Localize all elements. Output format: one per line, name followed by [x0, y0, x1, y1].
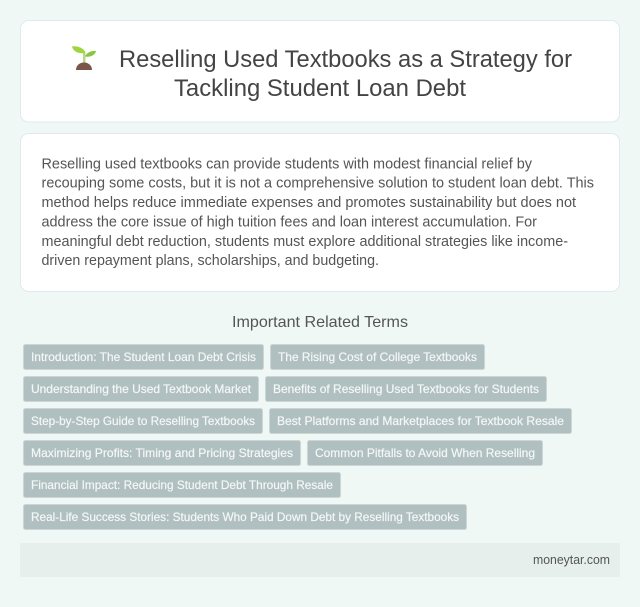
tag: Financial Impact: Reducing Student Debt Through Resale — [31, 478, 333, 492]
tag — [24, 440, 300, 466]
panel: title card — [20, 20, 620, 122]
tag: Real-Life Success Stories: Students Who Paid Down Debt by Reselling Textbooks — [31, 510, 459, 524]
tags: related terms — [24, 344, 572, 530]
tag — [308, 440, 542, 466]
tag: Introduction: The Student Loan Debt Crisis — [31, 350, 256, 364]
tag — [266, 376, 546, 402]
tag — [24, 408, 262, 434]
heading: related terms: Important Related Terms — [232, 314, 408, 331]
tag: Step-by-Step Guide to Reselling Textbooks — [31, 414, 255, 428]
summary text: address the core issue of high tuition fees and loan interest accumulation. For — [42, 214, 537, 230]
tag: The Rising Cost of College Textbooks — [278, 350, 477, 364]
title: Reselling Used Textbooks as a Strategy for — [119, 46, 572, 73]
panel: summary — [20, 134, 620, 292]
title — [119, 46, 572, 102]
tag: Benefits of Reselling Used Textbooks for Students — [273, 382, 539, 396]
summary text: meaningful debt reduction, students must explore additional strategies like income- — [42, 234, 568, 250]
tag — [24, 376, 258, 402]
tag — [270, 344, 484, 370]
summary text — [42, 156, 594, 269]
tag: Understanding the Used Textbook Market — [31, 382, 252, 396]
summary text: driven repayment plans, scholarships, and budgeting. — [42, 253, 379, 269]
summary text: Reselling used textbooks can provide students with modest financial relief by — [42, 156, 533, 172]
footer source: moneytar.com — [533, 552, 610, 567]
tag — [270, 408, 572, 434]
tag — [24, 504, 466, 530]
summary text: method helps reduce immediate expenses and promotes sustainability but does not — [42, 195, 576, 211]
footer — [20, 543, 620, 577]
tag — [24, 472, 340, 498]
tag: Maximizing Profits: Timing and Pricing Strategies — [31, 446, 293, 460]
icon: sprout — [72, 46, 96, 70]
tag — [24, 344, 264, 370]
summary text: recouping some costs, but it is not a comprehensive solution to student loan debt. This — [42, 176, 594, 192]
tag: Best Platforms and Marketplaces for Textbook Resale — [277, 414, 564, 428]
tag: Common Pitfalls to Avoid When Reselling — [315, 446, 535, 460]
title: Tackling Student Loan Debt — [174, 75, 466, 102]
